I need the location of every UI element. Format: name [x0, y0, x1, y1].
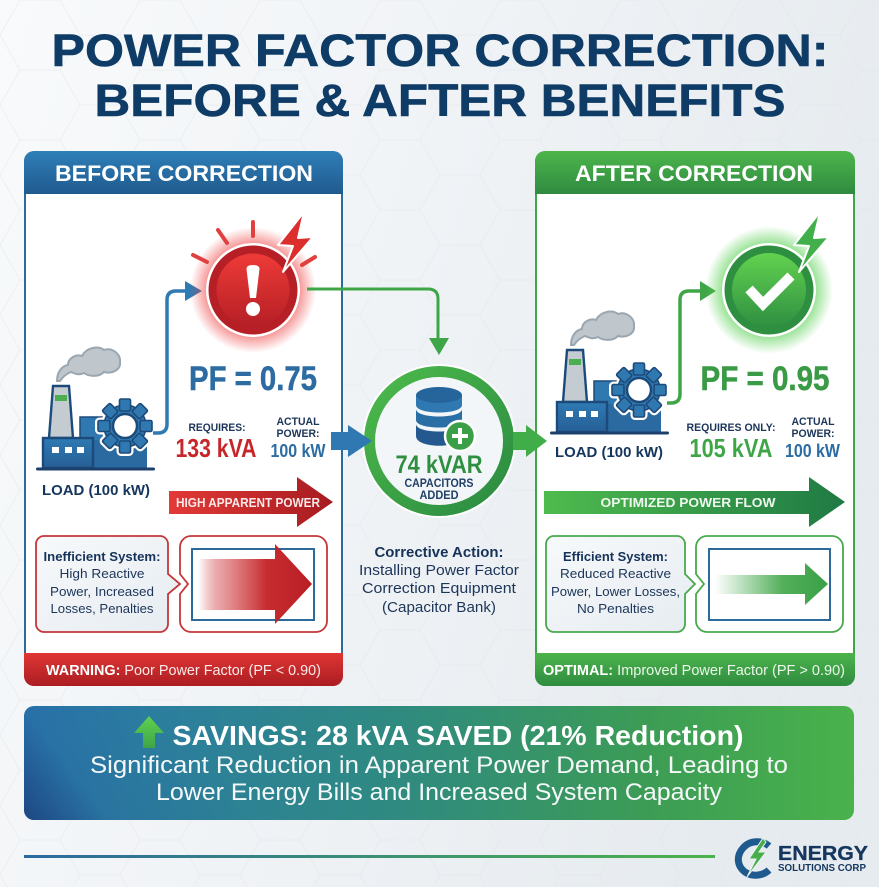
requires label: REQUIRES:: [188, 422, 246, 434]
corrective action text: (Capacitor Bank): [382, 600, 496, 616]
savings description: [90, 752, 788, 806]
logo name: ENERGY: [778, 843, 869, 865]
callout: inefficient system: Power, Increased: [50, 584, 154, 599]
corrective action text: Correction Equipment: [362, 581, 516, 597]
panel header: [24, 151, 343, 194]
arrow: load to optimal: [667, 281, 716, 403]
callout: inefficient system: Losses, Penalties: [50, 601, 154, 616]
callout: efficient system: Power, Lower Losses,: [551, 584, 680, 599]
icon: success check: [705, 212, 833, 354]
panel: before correction: [24, 151, 343, 686]
optimal footer: [535, 653, 855, 686]
logo mark: [738, 838, 769, 877]
actual power label: [792, 416, 835, 440]
icon: warning alert: [190, 212, 316, 353]
actual power label: POWER:: [276, 428, 320, 440]
diagram: reactive power box: [180, 536, 327, 632]
callout: efficient system: No Penalties: [577, 601, 655, 616]
icon: up arrow: [134, 716, 164, 748]
arrow: high apparent power: HIGH APPARENT POWER: [176, 495, 321, 510]
callout: inefficient system: Inefficient System:: [44, 549, 160, 564]
warning footer: WARNING: Poor Power Factor (PF < 0.90): [46, 663, 321, 679]
callout: inefficient system: High Reactive: [60, 566, 144, 581]
savings description: Significant Reduction in Apparent Power Demand, Leading to: [90, 752, 788, 779]
logo: energy solutions corp: [738, 838, 869, 877]
arrow: warning to capacitors: [307, 289, 449, 355]
arrow: high apparent power: [169, 477, 333, 527]
icon: factory load: [36, 348, 155, 470]
corrective action text: Corrective Action:: [374, 545, 504, 561]
savings banner: [24, 706, 854, 820]
savings headline: SAVINGS: 28 kVA SAVED (21% Reduction): [172, 720, 744, 751]
diagram: reactive power box: [696, 536, 843, 632]
logo subtitle: SOLUTIONS CORP: [778, 863, 866, 874]
actual power label: POWER:: [792, 428, 834, 440]
actual power label: ACTUAL: [792, 416, 835, 428]
actual power value: 100 kW: [270, 441, 326, 461]
panel body: [536, 152, 854, 685]
arrow: load to warning: [153, 281, 202, 433]
corrective action text: Installing Power Factor: [359, 563, 519, 579]
arrow: before panel into capacitors: [331, 425, 372, 457]
optimal footer: OPTIMAL: Improved Power Factor (PF > 0.90): [543, 663, 845, 679]
warning footer: [24, 653, 343, 686]
load label: LOAD (100 kW): [555, 444, 663, 461]
power factor value: PF = 0.75: [189, 360, 317, 398]
title: POWER FACTOR CORRECTION:: [52, 25, 828, 76]
icon: capacitor stack: [416, 387, 475, 451]
header label: BEFORE CORRECTION: [55, 161, 313, 186]
power factor value: PF = 0.95: [700, 360, 830, 398]
panel body: [25, 152, 342, 685]
actual power label: ACTUAL: [276, 416, 320, 428]
requires only label: REQUIRES ONLY:: [686, 422, 776, 434]
capacitor caption: [404, 478, 474, 502]
actual power label: [276, 416, 320, 440]
callout: efficient system: Reduced Reactive: [560, 566, 671, 581]
callout: inefficient system: [36, 536, 180, 632]
corrective action text: [359, 545, 519, 616]
capacitor caption: ADDED: [420, 490, 458, 502]
apparent power value: 105 kVA: [690, 433, 773, 463]
arrow: optimized power flow: [544, 477, 845, 527]
capacitor value: 74 kVAR: [396, 451, 482, 479]
callout: efficient system: [546, 536, 695, 632]
capacitor caption: CAPACITORS: [404, 478, 474, 490]
capacitor bank badge: [362, 364, 516, 518]
title: BEFORE & AFTER BENEFITS: [94, 75, 786, 126]
actual power value: 100 kW: [785, 441, 840, 461]
arrow: capacitors into after panel: [513, 425, 547, 457]
panel: after correction: [535, 151, 855, 686]
title: [52, 25, 828, 126]
icon: factory load: [550, 312, 669, 434]
callout: efficient system: Efficient System:: [563, 549, 668, 564]
savings description: Lower Energy Bills and Increased System Capacity: [156, 779, 722, 806]
load label: LOAD (100 kW): [42, 482, 150, 499]
arrow: optimized power flow: OPTIMIZED POWER FLOW: [600, 495, 776, 510]
header label: AFTER CORRECTION: [575, 161, 813, 186]
panel header: [535, 151, 855, 194]
apparent power value: 133 kVA: [176, 433, 257, 463]
